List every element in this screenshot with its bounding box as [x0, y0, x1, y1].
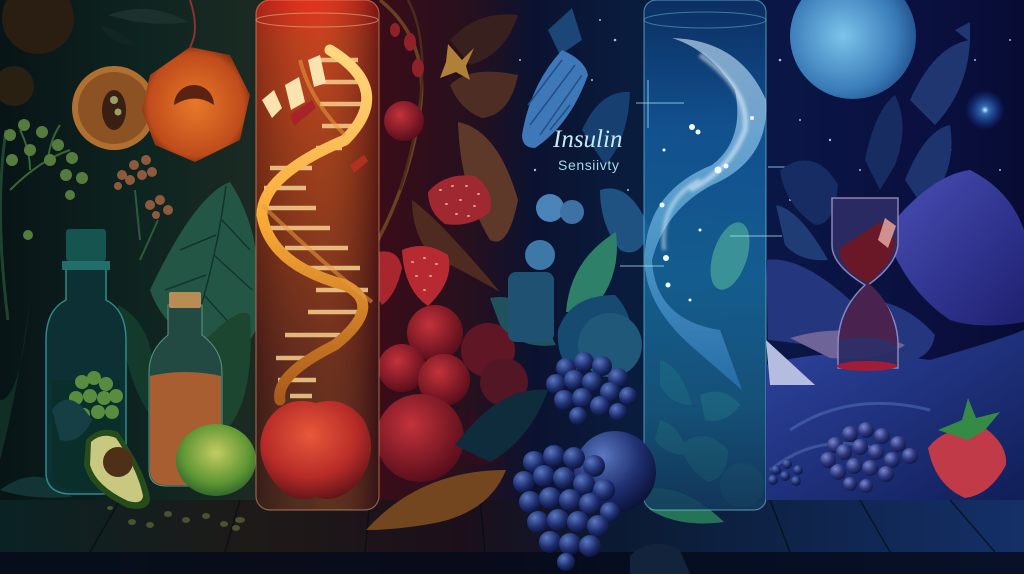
panel: berries and vines — [378, 0, 518, 292]
swirl — [645, 38, 766, 390]
panel: bed with pillow — [766, 170, 1024, 500]
dna helix rungs — [262, 60, 368, 396]
panel: night leaves — [776, 22, 970, 260]
panel: red test tube with DNA helix — [256, 0, 379, 510]
icon: green apple half — [176, 424, 256, 496]
amino fragments — [262, 55, 326, 118]
icon: blackberry right — [820, 422, 918, 493]
icon: large grape cluster — [513, 445, 620, 571]
icon: large red apple — [260, 401, 371, 499]
title text: Insulin Sensitivity: Sensiivty — [558, 157, 619, 173]
title text: Insulin Sensitivity — [552, 126, 622, 173]
icon: strawberry right — [928, 398, 1006, 498]
icon: small berries — [768, 459, 803, 486]
icon: green leaf capsule — [703, 217, 757, 295]
panel: blue test tube with swirl — [620, 0, 792, 510]
floor planks — [0, 500, 1024, 574]
icon: dark bottle — [46, 229, 126, 494]
icon: star glow — [965, 90, 1005, 130]
title text: Insulin Sensitivity: Insulin — [552, 126, 622, 153]
big leaf behind bottle — [150, 182, 259, 358]
icon: moon — [790, 0, 916, 99]
icon: strawberries group — [372, 246, 528, 482]
icon: blue corn cob — [522, 50, 588, 148]
icon: wine hourglass — [832, 198, 898, 371]
panel: nutrition foliage left — [0, 0, 259, 498]
icon: feather leaf on floor — [366, 470, 506, 530]
nut top-left — [2, 0, 74, 54]
icon: blackberry top center — [546, 352, 637, 425]
scattered seeds — [107, 506, 245, 531]
sparkles — [660, 116, 754, 302]
icon: juice bottle — [149, 292, 222, 486]
dna strand — [262, 50, 367, 400]
icon: strawberry on vine — [428, 175, 491, 225]
icon: avocado half — [84, 430, 150, 509]
icon: blue plum — [574, 431, 656, 513]
panel: blue vegetables and foliage — [455, 8, 764, 524]
stars — [519, 19, 1011, 201]
icon: dark dried fruit bottom — [630, 544, 690, 574]
icon: sliced fruit halves — [72, 0, 250, 162]
